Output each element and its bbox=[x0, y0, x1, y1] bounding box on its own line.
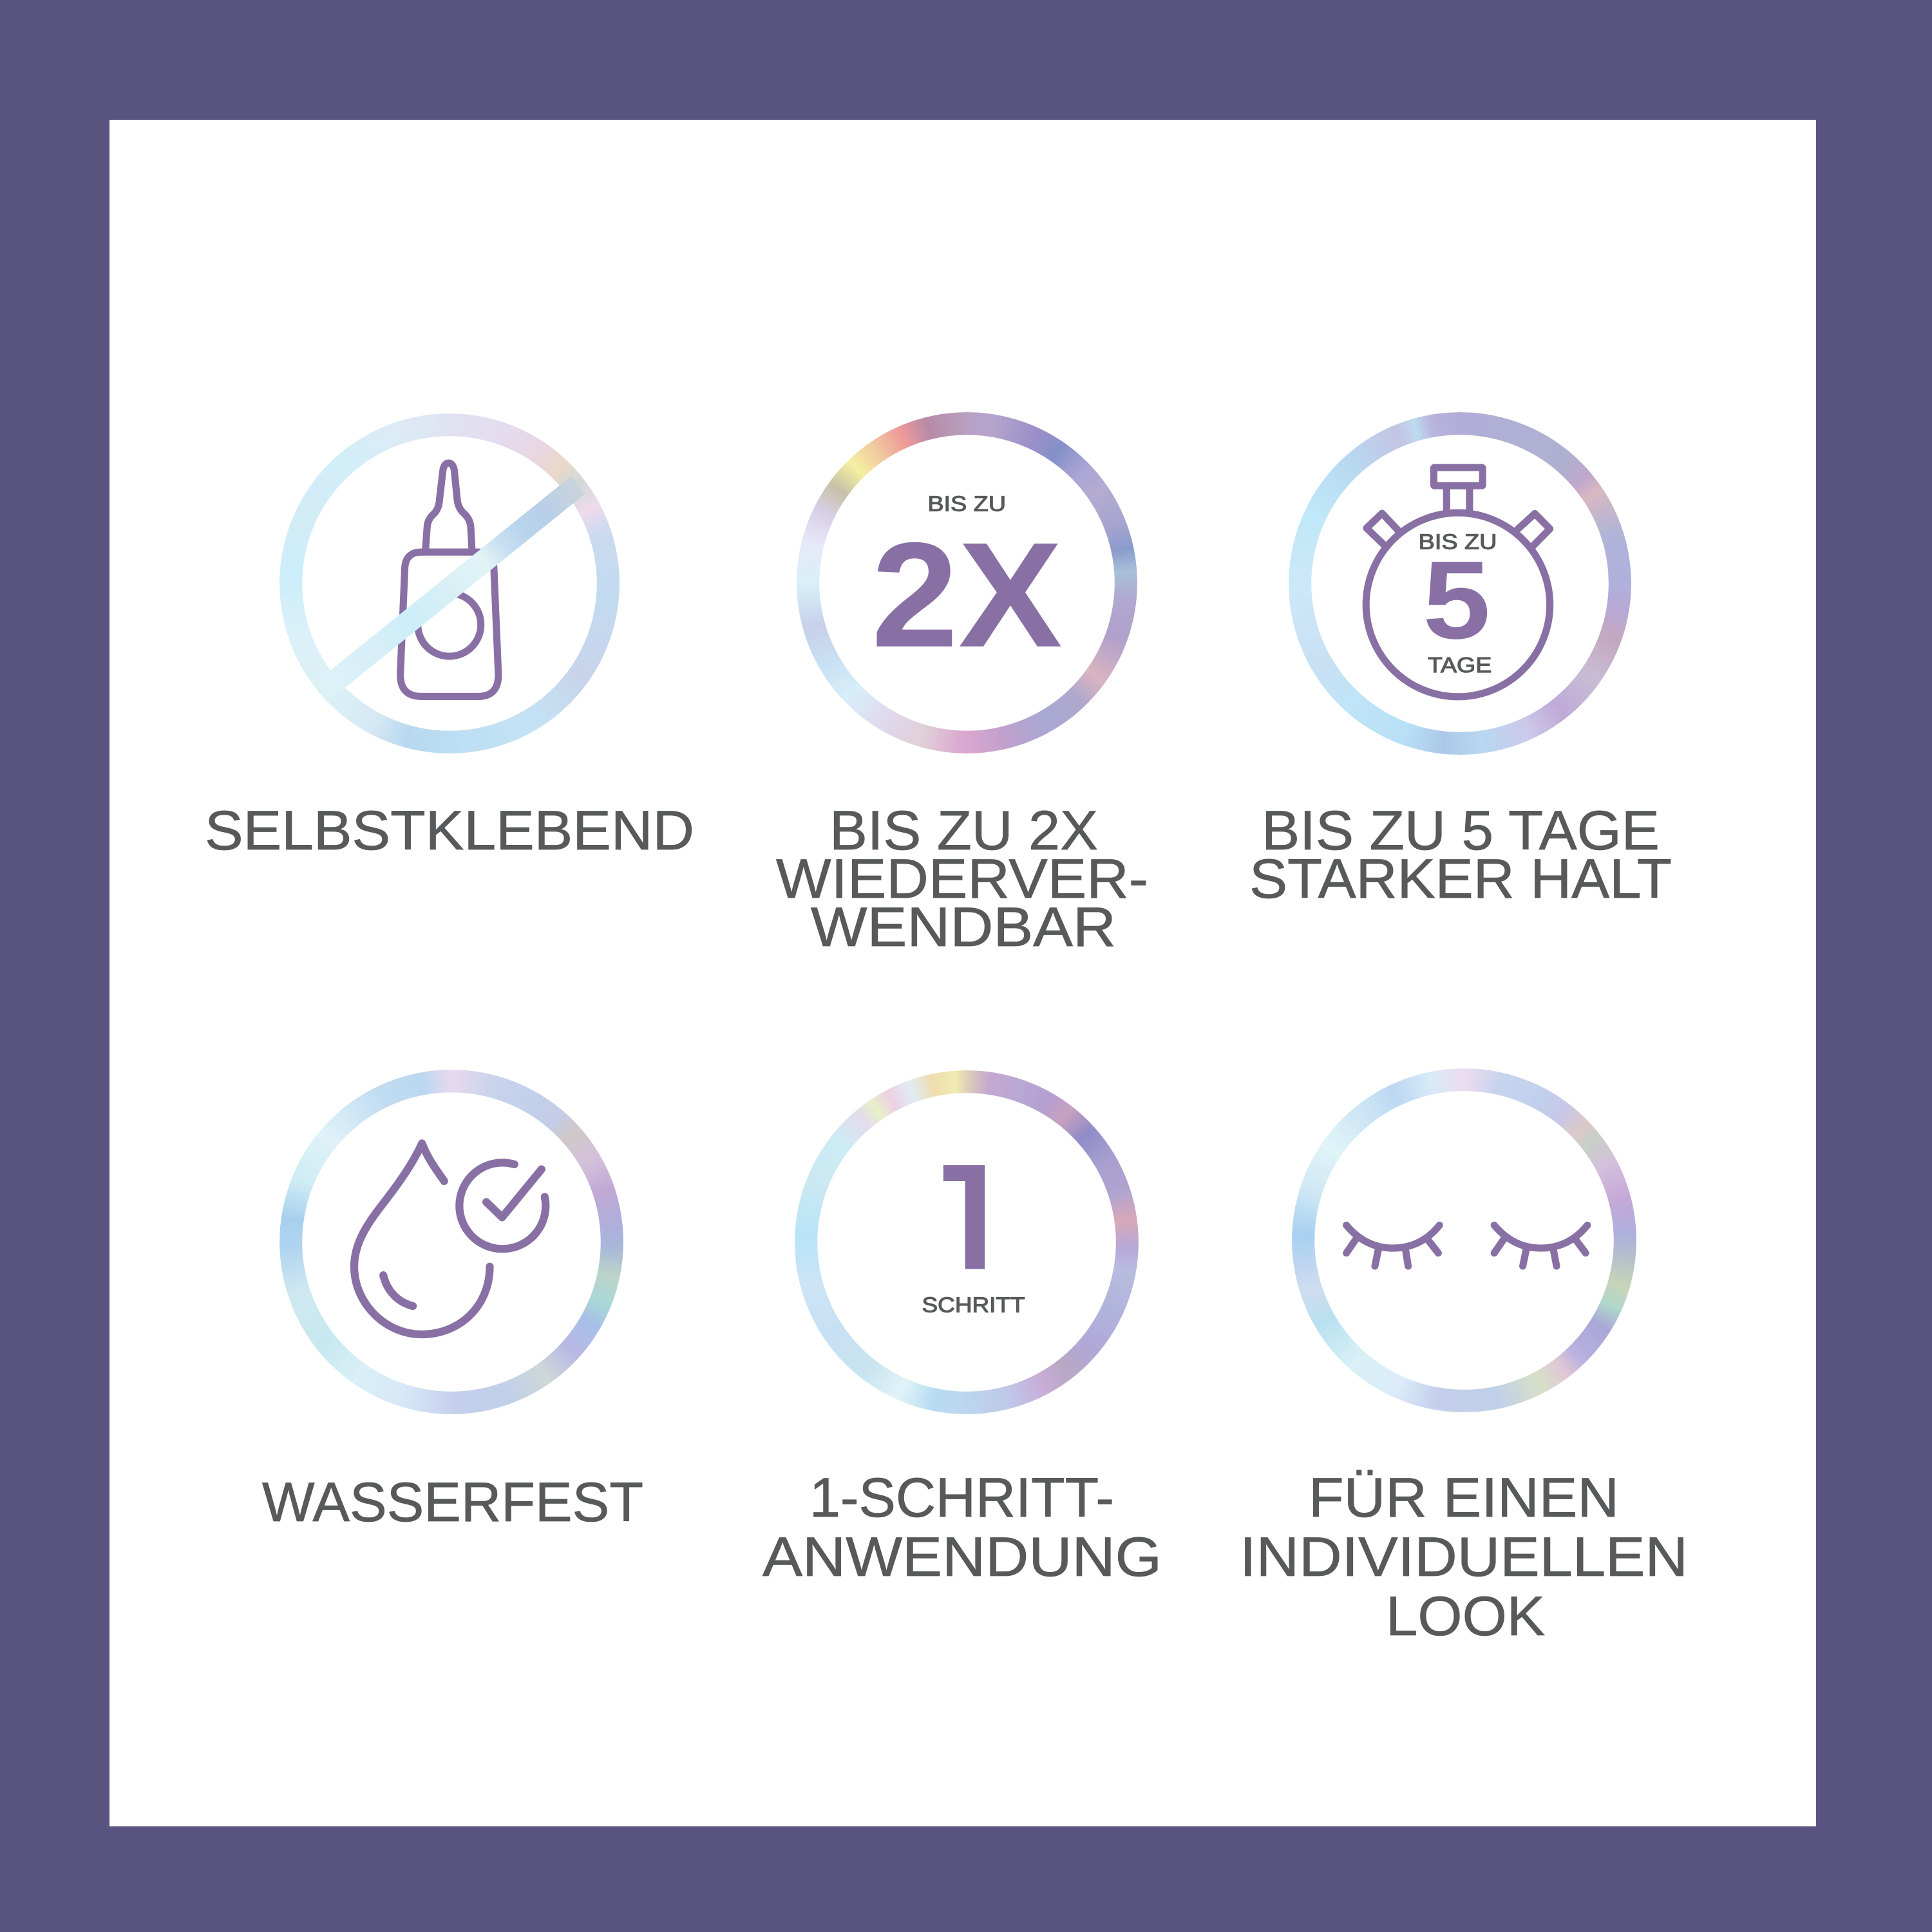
water drop bbox=[354, 1143, 490, 1334]
right eye bbox=[1494, 1225, 1587, 1266]
icon: closed eyes with lashes bbox=[1347, 1225, 1587, 1266]
label: selbstklebend: SELBSTKLEBEND bbox=[205, 800, 694, 862]
label: bis zu 5 tage starker halt: BIS ZU 5 TAGE bbox=[1262, 800, 1660, 862]
icon ring: holographic circle 3 bbox=[1289, 412, 1631, 755]
bottle nozzle bbox=[426, 463, 472, 550]
label: für einen individuellen look bbox=[1240, 1467, 1688, 1647]
check mark bbox=[486, 1170, 542, 1217]
big number: 5: 5 bbox=[1423, 538, 1490, 662]
bottle body bbox=[401, 552, 498, 696]
drop highlight bbox=[383, 1275, 413, 1306]
small text: tage: TAGE bbox=[1428, 654, 1492, 677]
label: 1-schritt-anwendung: 1-SCHRITT- bbox=[810, 1467, 1114, 1529]
small text: bis zu: BIS ZU bbox=[1419, 531, 1497, 554]
label: bis zu 5 tage starker halt: STARKER HALT bbox=[1249, 848, 1672, 910]
panel: 1 schritt bbox=[762, 1070, 1162, 1588]
icon: 1 schritt text bbox=[922, 1165, 1025, 1312]
label: bis zu 2x wiederverwendbar bbox=[776, 800, 1148, 958]
icon: stopwatch bbox=[1366, 468, 1550, 697]
icon ring: holographic circle 5 bbox=[795, 1070, 1139, 1414]
label: 1-schritt-anwendung: ANWENDUNG bbox=[762, 1526, 1162, 1588]
big number: 1: 1 bbox=[930, 1133, 1014, 1302]
label: für einen individuellen look: LOOK bbox=[1386, 1586, 1545, 1647]
bottle drop circle bbox=[418, 593, 481, 656]
label: bis zu 2x wiederverwendbar: WIEDERVER- bbox=[776, 848, 1148, 910]
big text: 2X: 2X bbox=[871, 512, 1063, 679]
panel: bis zu 2x bbox=[775, 412, 1148, 958]
left eye bbox=[1347, 1225, 1439, 1266]
stopwatch left knob bbox=[1367, 513, 1400, 545]
icon ring: holographic circle 4 bbox=[279, 1070, 623, 1414]
small text: bis zu: BIS ZU bbox=[927, 492, 1006, 516]
label: für einen individuellen look: INDIVIDUELLEN bbox=[1240, 1526, 1688, 1588]
white card bbox=[109, 120, 1816, 1826]
stopwatch button bbox=[1434, 468, 1482, 486]
icon: bis zu 2x text bbox=[871, 492, 1063, 679]
stopwatch face bbox=[1366, 513, 1550, 697]
icon ring: holographic circle 1 bbox=[279, 413, 620, 753]
prohibition slash bbox=[319, 476, 585, 696]
label: wasserfest: WASSERFEST bbox=[262, 1472, 643, 1533]
panel: bis zu 5 tage bbox=[1249, 412, 1672, 910]
check circle bbox=[459, 1162, 545, 1249]
panel: selbstklebend bbox=[205, 413, 694, 862]
label: für einen individuellen look: FÜR EINEN bbox=[1309, 1467, 1619, 1529]
label: bis zu 2x wiederverwendbar: WENDBAR bbox=[811, 896, 1116, 958]
icon: water drop with check bbox=[354, 1143, 545, 1334]
stopwatch stem bbox=[1446, 486, 1470, 511]
panel: wasserfest bbox=[261, 1070, 643, 1533]
panel: individueller look bbox=[1240, 1068, 1688, 1647]
label: 1-schritt-anwendung bbox=[762, 1467, 1162, 1588]
icon: glue bottle crossed out bbox=[319, 463, 585, 696]
stopwatch right knob bbox=[1518, 513, 1550, 546]
label: bis zu 5 tage starker halt bbox=[1249, 800, 1672, 910]
icon ring: holographic circle 2 bbox=[797, 412, 1137, 753]
big number: 1 bbox=[943, 1165, 985, 1269]
icon ring: holographic circle 6 bbox=[1292, 1068, 1636, 1412]
small text: schritt: SCHRITT bbox=[922, 1294, 1025, 1318]
label: bis zu 2x wiederverwendbar: BIS ZU 2X bbox=[829, 800, 1098, 862]
